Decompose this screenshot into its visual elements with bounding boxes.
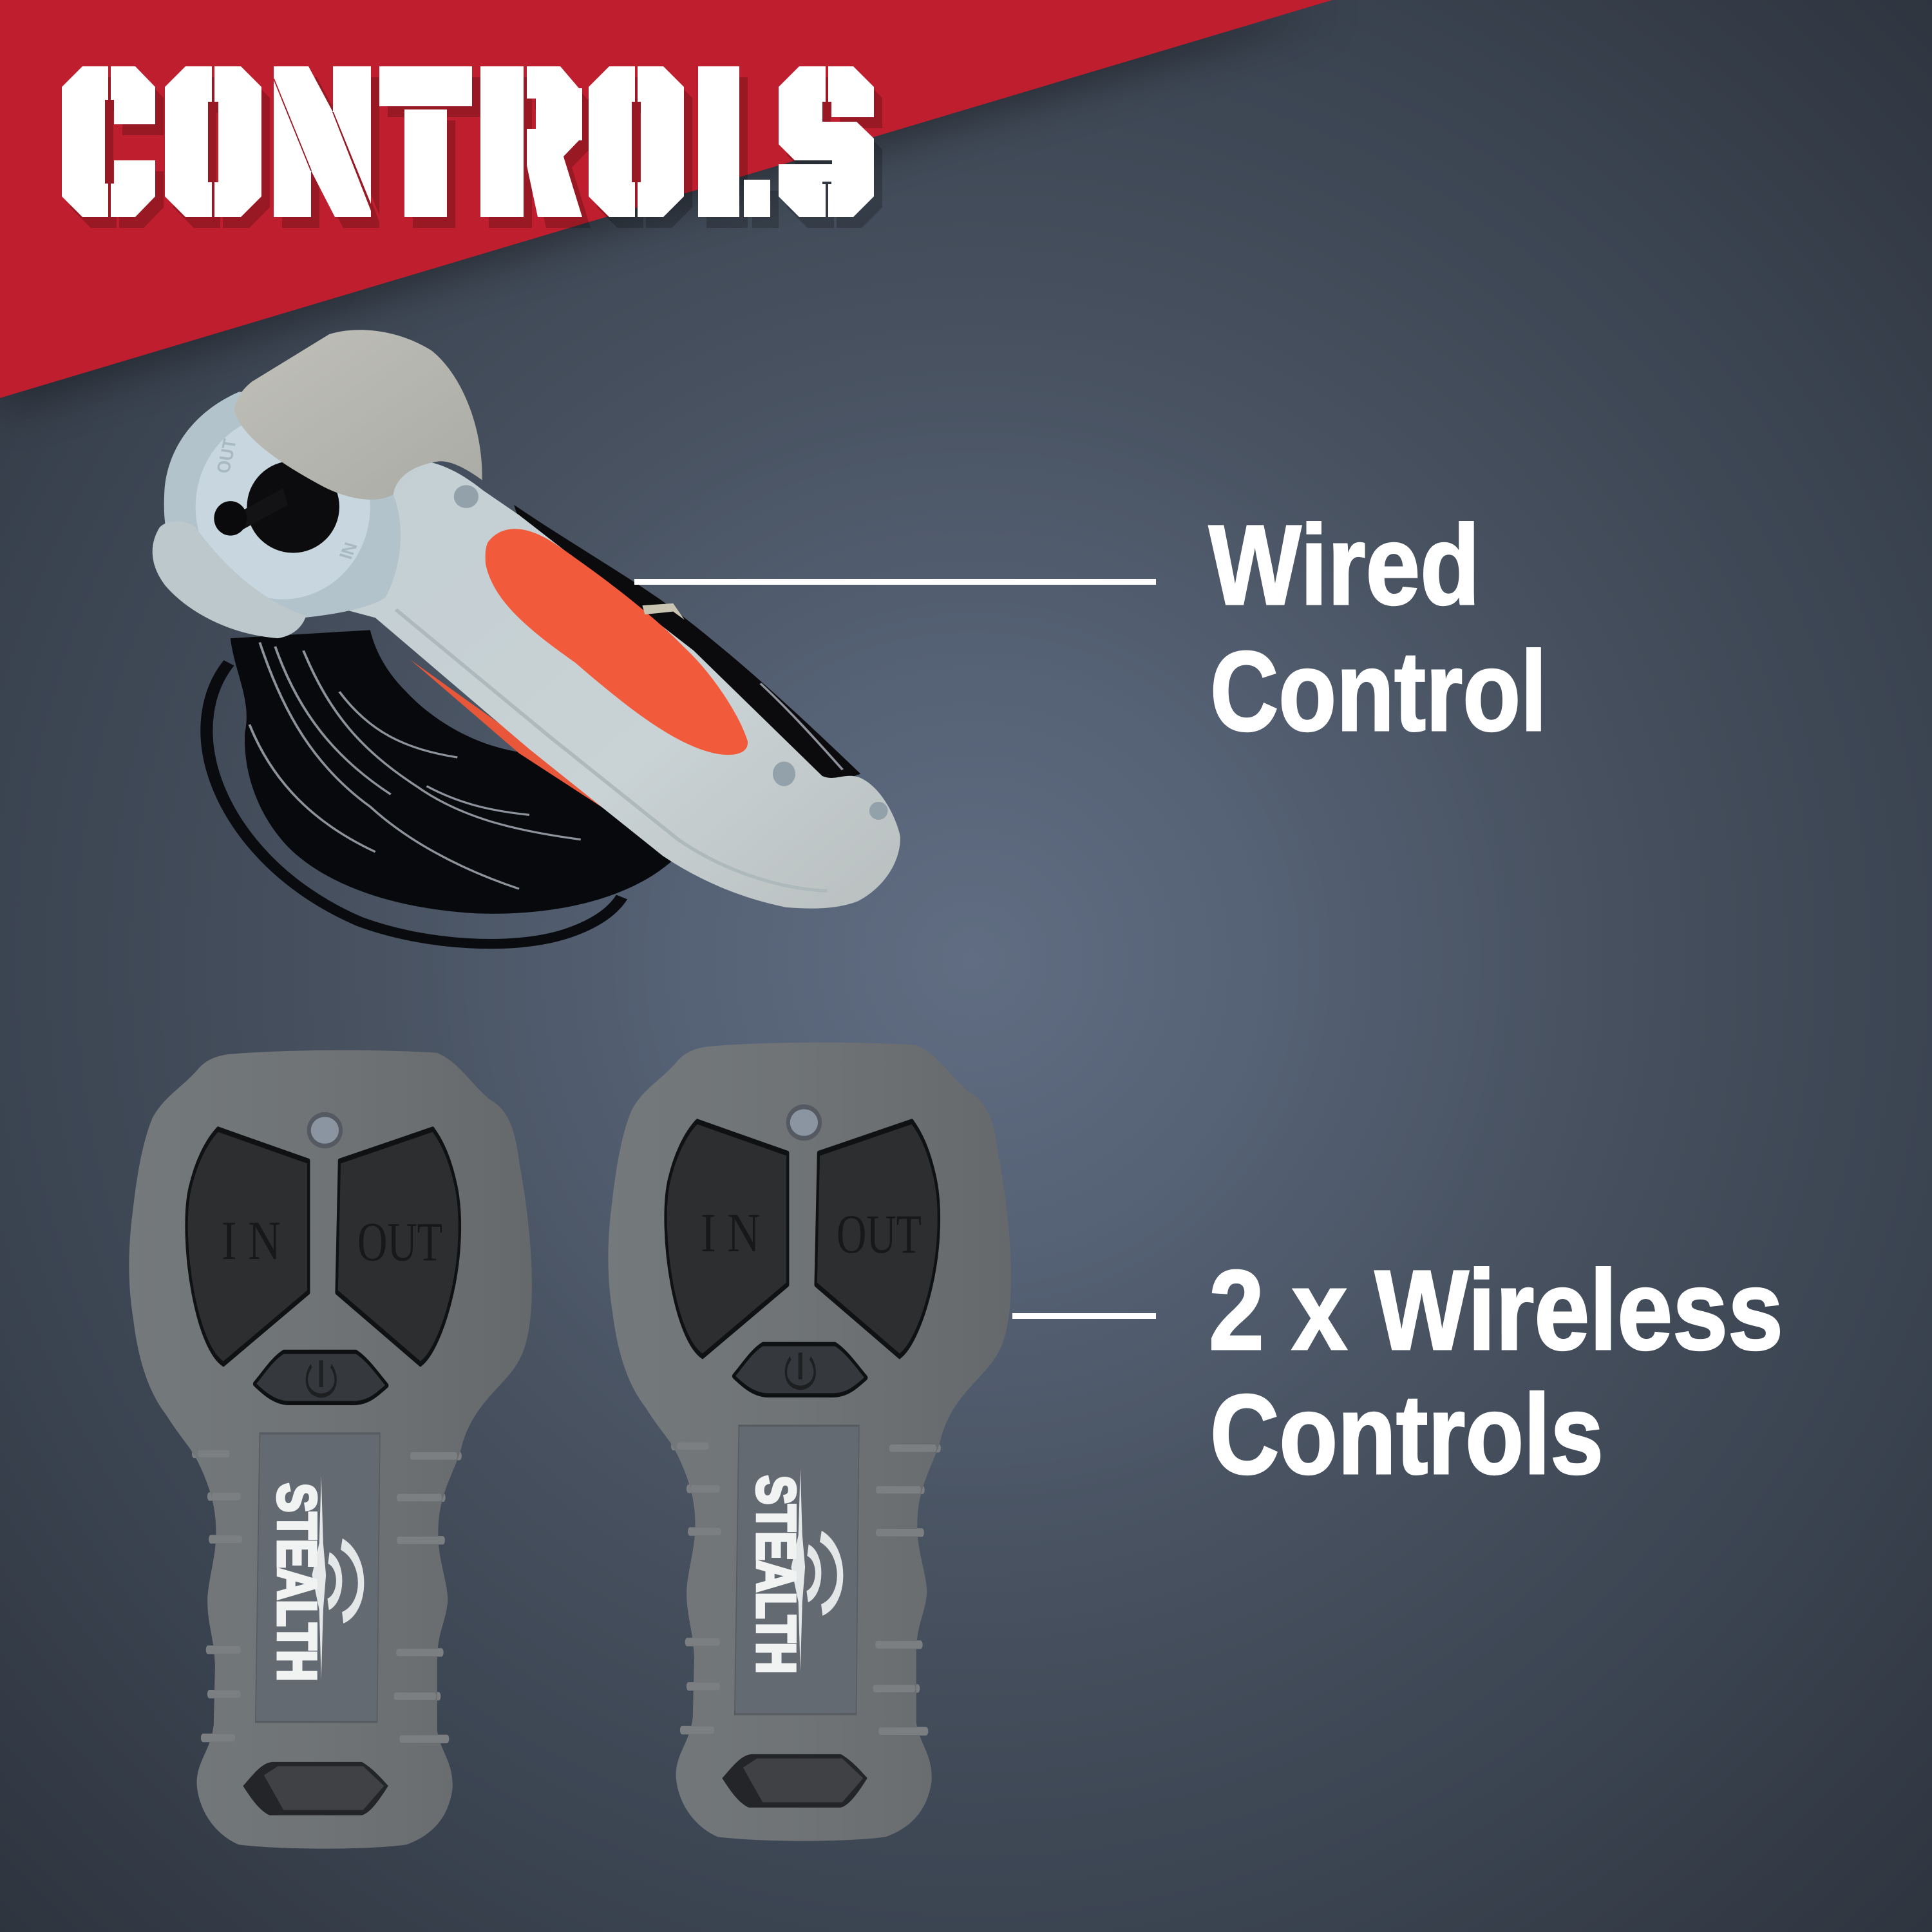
embossed switch labels <box>212 437 361 562</box>
slot inner <box>264 1766 384 1810</box>
wing emblem <box>791 1468 805 1671</box>
head rim <box>164 392 401 618</box>
orange strip under handle <box>410 659 647 837</box>
wireless remote right <box>608 1043 1011 1841</box>
wired control photo illustration <box>153 330 900 944</box>
embossed switch labels: OUT <box>212 437 241 475</box>
power button <box>254 1352 388 1403</box>
slot inner <box>743 1758 863 1802</box>
hanging slot <box>722 1754 867 1808</box>
side ridges <box>194 1454 459 1739</box>
handle lower shading <box>396 609 827 891</box>
remote body <box>129 1050 532 1849</box>
cable behind handle <box>514 505 860 784</box>
label: wireless controls <box>1209 1247 1783 1498</box>
toggle ball <box>214 501 247 536</box>
IN button <box>666 1121 788 1356</box>
label: wireless controls: 2 x Wireless <box>1209 1247 1783 1374</box>
red header banner <box>0 0 1332 398</box>
title: C <box>64 34 152 250</box>
button text: I N <box>222 1209 281 1271</box>
button text <box>222 1209 442 1273</box>
connector line: wired control <box>634 579 1156 585</box>
ridge nubs on body <box>200 1454 455 1739</box>
embossed switch labels: IN <box>335 540 361 562</box>
wireless waves <box>328 1544 361 1618</box>
brand plate <box>256 1434 380 1722</box>
side ridges <box>673 1446 938 1731</box>
orange grip <box>486 529 748 755</box>
brand plate <box>735 1426 859 1714</box>
connector line: wireless controls <box>1012 1313 1156 1319</box>
toggle lever <box>234 488 288 531</box>
label: wireless controls: Controls <box>1210 1372 1604 1498</box>
cable coil mass <box>231 630 673 914</box>
wireless remote left <box>129 1050 532 1849</box>
button text: I N <box>701 1202 760 1264</box>
title <box>62 66 882 228</box>
status LED <box>307 1112 343 1148</box>
lower flap <box>153 521 306 638</box>
toggle collar <box>247 461 339 553</box>
power icon <box>307 1360 336 1396</box>
OUT button <box>337 1129 460 1364</box>
label: wired control: Wired <box>1209 502 1480 629</box>
title: L <box>699 34 770 249</box>
title: O <box>592 34 681 249</box>
stealth logo: STEALTH <box>267 1483 327 1681</box>
stealth logo: STEALTH <box>746 1475 806 1674</box>
hood <box>234 330 482 500</box>
label: wired control <box>1209 502 1547 755</box>
outer cable loop <box>207 663 622 944</box>
label: wired control: Control <box>1210 629 1547 755</box>
switch dial <box>196 415 370 600</box>
OUT button <box>816 1121 939 1356</box>
cable tie <box>642 603 685 620</box>
status LED <box>786 1104 822 1141</box>
button text: OUT <box>357 1211 442 1273</box>
title: S <box>784 33 869 249</box>
power icon <box>786 1352 815 1388</box>
button text <box>701 1202 922 1265</box>
button text: OUT <box>837 1203 922 1265</box>
wireless waves <box>808 1537 840 1610</box>
power button <box>734 1344 867 1396</box>
title: O <box>168 34 258 249</box>
wing emblem <box>312 1476 326 1679</box>
title: R <box>484 34 579 249</box>
IN button <box>187 1129 308 1364</box>
ridge nubs on body <box>679 1446 934 1731</box>
handle body <box>345 460 900 909</box>
mounting holes <box>454 485 888 820</box>
title: T <box>390 34 461 249</box>
cable highlights <box>249 642 842 889</box>
remote body <box>608 1043 1011 1841</box>
hanging slot <box>243 1762 388 1815</box>
title: N <box>274 34 370 249</box>
